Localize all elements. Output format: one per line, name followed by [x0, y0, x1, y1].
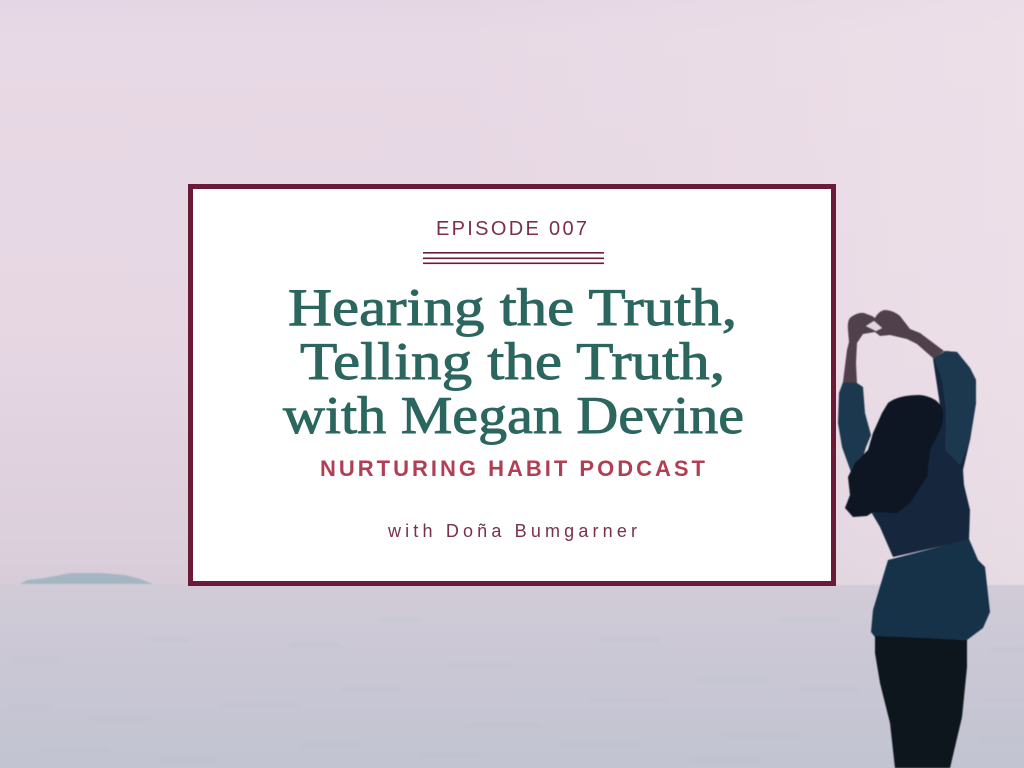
title: with Megan Devine [283, 387, 744, 445]
background photo: sky [0, 0, 1024, 590]
title: Telling the Truth, [300, 333, 725, 391]
episode number: EPISODE 007 [436, 218, 587, 240]
lower jacket [871, 539, 990, 640]
podcast name: NURTURING HABIT PODCAST [320, 456, 706, 481]
hair [845, 395, 943, 517]
host line: with Doña Bumgarner [387, 521, 637, 541]
heart gap between the hands [866, 321, 882, 331]
trousers [875, 636, 967, 768]
woman silhouette making a heart with her hands [838, 310, 990, 768]
island on the horizon [20, 573, 153, 584]
panel: episode card [190, 186, 834, 584]
triple rule divider [423, 252, 604, 264]
jacket torso and right sleeve [863, 351, 976, 557]
arms and hands [843, 310, 944, 384]
right sleeve highlight [934, 351, 976, 465]
title: Hearing the Truth, [288, 279, 737, 337]
background photo: sea with ripples [0, 585, 1024, 768]
left sleeve [838, 382, 871, 472]
title [283, 279, 744, 445]
